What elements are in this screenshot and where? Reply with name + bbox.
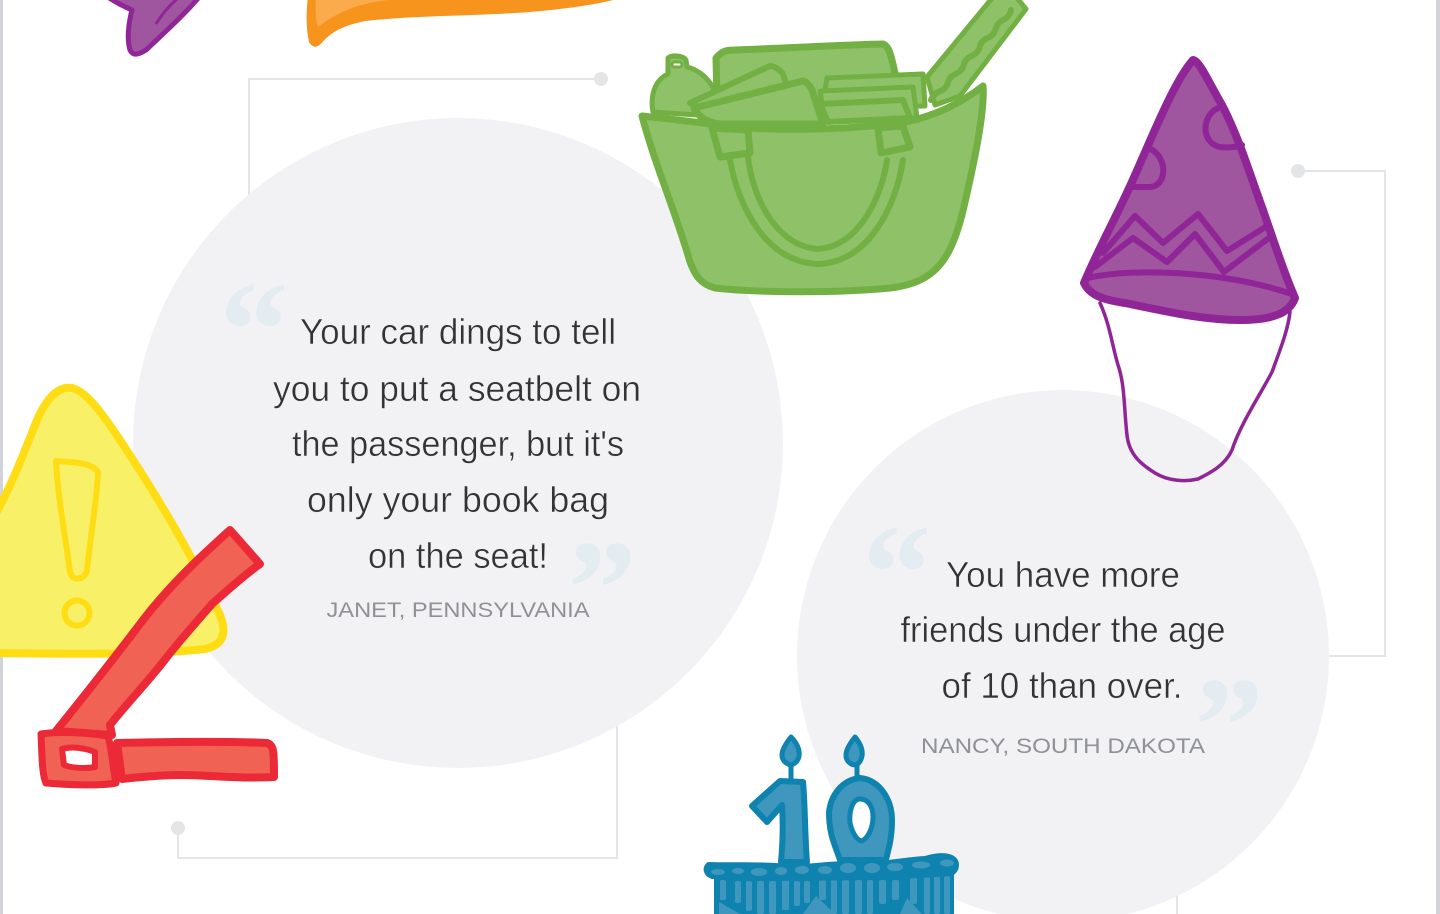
quote text: of 10 than over.	[942, 665, 1182, 706]
cake body	[714, 872, 954, 914]
icon: purple fragment top left	[106, 0, 200, 54]
handle	[730, 157, 903, 264]
icon: purple party hat	[1084, 60, 1295, 481]
icon: green bag	[642, 0, 1026, 292]
bottle	[652, 56, 715, 116]
quote text: You have more	[946, 554, 1180, 595]
closing quote mark: ”	[568, 512, 636, 665]
opening quote mark: “	[862, 496, 932, 649]
quote text: friends under the age	[900, 609, 1226, 650]
hat brim line	[1088, 272, 1292, 294]
icon: orange fragment top	[308, 0, 617, 46]
panel: Janet quote	[133, 118, 783, 768]
attribution: NANCY, SOUTH DAKOTA	[921, 735, 1205, 758]
exclamation mark	[56, 461, 98, 626]
books	[716, 44, 895, 100]
connector: first quote bottom	[171, 720, 617, 858]
frosting	[705, 854, 958, 880]
quote text	[273, 311, 641, 576]
quote text	[900, 554, 1226, 706]
hat strap	[1100, 303, 1290, 481]
quote text: you to put a seatbelt on	[273, 368, 641, 409]
number one	[752, 781, 807, 862]
frosting dollops	[711, 860, 954, 876]
cake stripes	[719, 876, 950, 914]
handle tabs	[712, 128, 750, 157]
lower strap	[117, 742, 274, 779]
icon: red seatbelt strap	[41, 530, 274, 785]
bag body	[642, 86, 983, 292]
upper strap	[56, 530, 260, 735]
ruler	[927, 0, 1026, 105]
closing quote mark: ”	[1194, 649, 1264, 802]
icon: blue birthday cake with 10 candles	[705, 737, 958, 914]
number zero	[829, 778, 892, 860]
quote text: the passenger, but it's	[292, 423, 624, 464]
flames	[782, 737, 799, 765]
opening quote mark: “	[220, 253, 288, 406]
attribution: JANET, PENNSYLVANIA	[326, 599, 590, 622]
quote text: only your book bag	[307, 479, 609, 520]
connector: first quote top	[249, 72, 608, 200]
quote text: Your car dings to tell	[300, 311, 616, 352]
panel: Nancy quote	[797, 390, 1329, 914]
buckle	[41, 733, 116, 785]
hat cone	[1084, 60, 1295, 320]
connector: second quote right	[1291, 164, 1385, 656]
connector: second quote bottom	[1176, 890, 1178, 914]
icon: yellow warning triangle	[0, 388, 224, 654]
buckle slot	[62, 748, 95, 768]
number zero hole	[850, 799, 873, 841]
quote text: on the seat!	[368, 535, 548, 576]
dots and zigzags	[1095, 107, 1270, 272]
